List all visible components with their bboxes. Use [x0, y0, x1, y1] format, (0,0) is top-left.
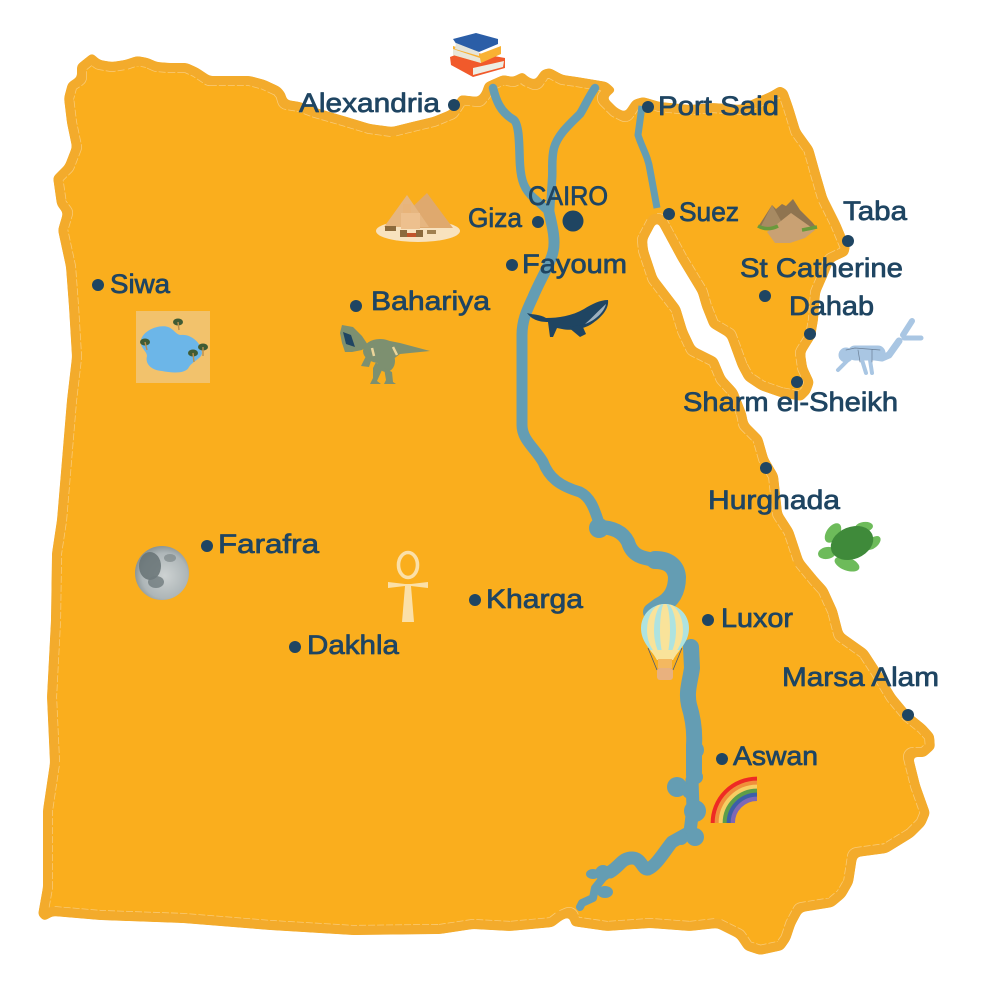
icon: oasis lake	[136, 311, 210, 383]
label: Dahab: Dahab	[789, 291, 874, 321]
label: Farafra: Farafra	[218, 529, 320, 559]
icon: hot air balloon	[640, 603, 690, 680]
icon: sea turtle	[817, 520, 883, 575]
icon: ankh	[388, 552, 428, 622]
icon: scuba diver	[838, 321, 921, 373]
river Nile	[493, 88, 706, 907]
icon: moon	[135, 546, 189, 600]
label: Port Said: Port Said	[658, 91, 779, 121]
label: Taba: Taba	[843, 196, 908, 226]
label: Sharm el-Sheikh: Sharm el-Sheikh	[683, 387, 898, 417]
icon: pyramids and sphinx	[376, 193, 460, 242]
label: St Catherine	[740, 253, 903, 302]
label: Luxor: Luxor	[721, 603, 793, 633]
label: Sharm el-Sheikh	[683, 376, 898, 417]
label: Suez: Suez	[679, 197, 739, 227]
label: Aswan: Aswan	[733, 741, 818, 771]
label: Cairo	[528, 181, 608, 232]
label: Alexandria: Alexandria	[299, 88, 441, 118]
label: Cairo: CAIRO	[528, 181, 608, 211]
icon: Sinai mountains	[758, 199, 817, 243]
icon: whale	[527, 300, 608, 337]
label: St Catherine: St Catherine	[740, 253, 903, 283]
label: Kharga: Kharga	[486, 584, 584, 614]
Suez Canal	[638, 106, 657, 208]
icon: stack of books	[450, 33, 505, 77]
label: Taba	[842, 196, 908, 247]
label: Marsa Alam	[782, 662, 939, 721]
label: Hurghada	[708, 462, 841, 515]
label: Dahab	[789, 291, 874, 340]
label: Dakhla: Dakhla	[307, 630, 400, 660]
label: Giza: Giza	[468, 203, 523, 233]
label: Fayoum: Fayoum	[522, 249, 627, 279]
label: Bahariya: Bahariya	[371, 286, 491, 316]
icon: T-rex dinosaur	[340, 325, 430, 384]
label: Hurghada: Hurghada	[708, 485, 841, 515]
label: Siwa: Siwa	[110, 269, 171, 299]
icon: rainbow	[713, 779, 757, 823]
label: Marsa Alam: Marsa Alam	[782, 662, 939, 692]
